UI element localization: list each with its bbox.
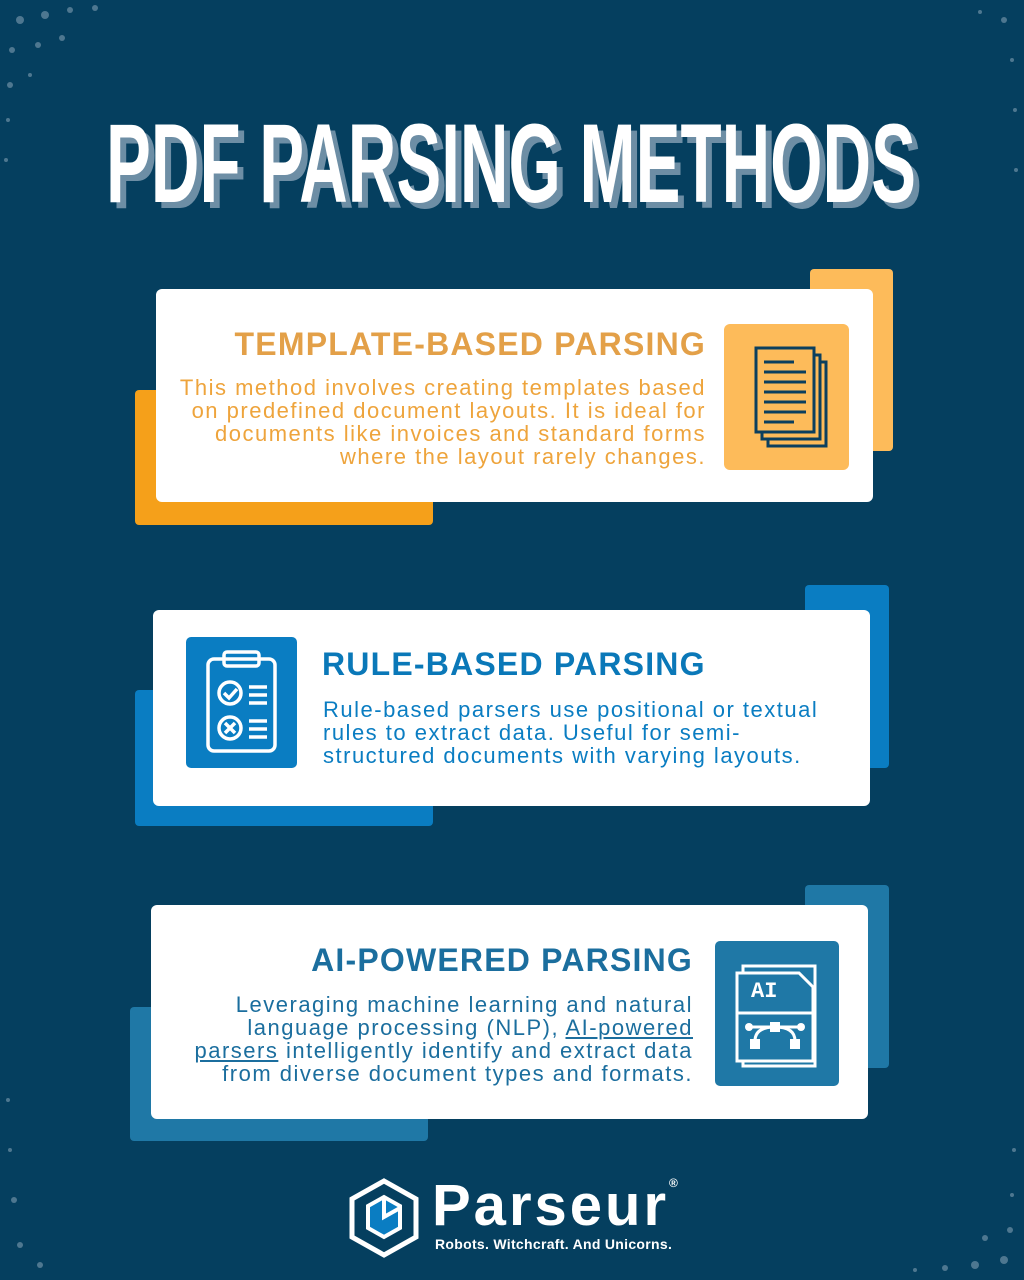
text: AI description bbox=[194, 992, 693, 1086]
text: rule description bbox=[323, 697, 818, 768]
logo: Parseur bbox=[350, 1173, 681, 1258]
panel: rule-based parsing bbox=[135, 585, 889, 826]
heading: AI-powered: AI-POWERED PARSING bbox=[311, 942, 693, 978]
panel: template-based parsing bbox=[135, 269, 893, 525]
text: template description: on predefined document layouts. It is ideal for bbox=[192, 398, 706, 423]
text: AI description: language processing (NLP), AI-powered bbox=[247, 1015, 693, 1040]
panel: AI-powered parsing bbox=[130, 885, 889, 1141]
icon: clipboard bbox=[186, 637, 297, 768]
text: template description: where the layout rarely changes. bbox=[340, 444, 706, 469]
text: template description: This method involves creating templates based bbox=[180, 375, 706, 400]
icon: AI file: AI bbox=[751, 979, 777, 1004]
text: rule description: structured documents with varying layouts. bbox=[323, 743, 802, 768]
text: AI description: Leveraging machine learning and natural bbox=[236, 992, 693, 1017]
text: AI description: parsers intelligently identify and extract data bbox=[194, 1038, 693, 1063]
logo: Parseur: Robots. Witchcraft. And Unicorns. bbox=[435, 1236, 672, 1252]
text: template description bbox=[180, 375, 706, 469]
icon: documents bbox=[724, 324, 849, 470]
text: template description: documents like invoices and standard forms bbox=[215, 421, 706, 446]
text: AI description: from diverse document types and formats. bbox=[222, 1061, 693, 1086]
text: rule description: Rule-based parsers use positional or textual bbox=[323, 697, 818, 722]
heading: template-based: TEMPLATE-BASED PARSING bbox=[235, 326, 706, 362]
logo: Parseur: Parseur® bbox=[432, 1173, 681, 1238]
text: rule description: rules to extract data. Useful for semi- bbox=[323, 720, 741, 745]
icon: AI file bbox=[715, 941, 839, 1086]
heading: rule-based: RULE-BASED PARSING bbox=[322, 646, 706, 682]
